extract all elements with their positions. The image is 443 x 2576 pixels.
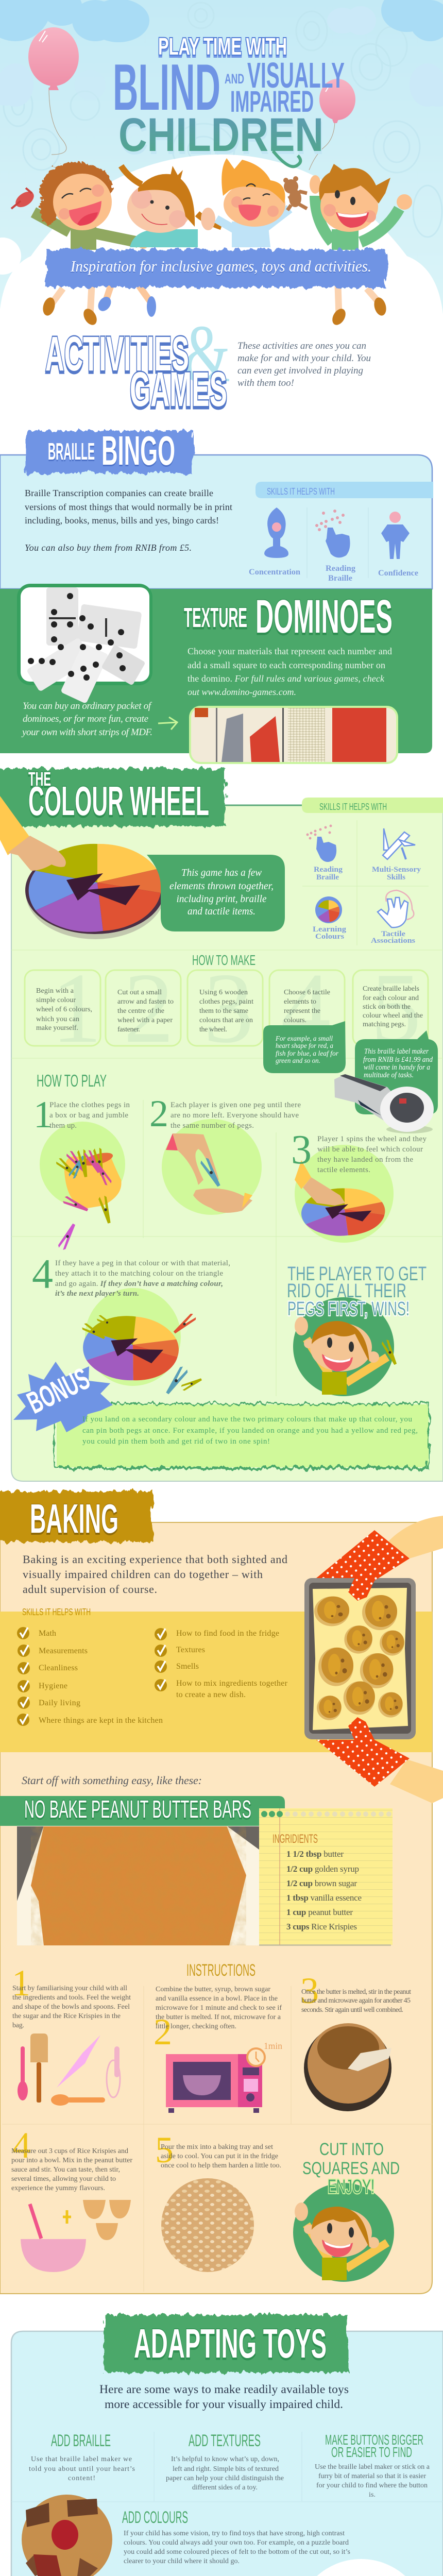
icon: reading braille bbox=[306, 824, 336, 862]
colour wheel banner: COLOUR WHEEL bbox=[28, 778, 209, 824]
skill checks right: Smells bbox=[176, 1662, 199, 1671]
adapting toys banner bbox=[104, 2315, 349, 2372]
step cards: Choose 6 tactile bbox=[284, 989, 330, 996]
callout: tactile example: fish for blue, a leaf for bbox=[276, 1050, 339, 1058]
panel: adapting toys bbox=[11, 2315, 443, 2576]
winner heading bbox=[287, 1263, 427, 1320]
dominoes italic note bbox=[21, 701, 152, 738]
hero header background bbox=[0, 0, 443, 345]
bonus text bbox=[82, 1415, 418, 1446]
texture dominoes heading: TEXTURE bbox=[184, 602, 247, 633]
children legs and shoes bbox=[41, 286, 388, 327]
skills bar bbox=[302, 798, 443, 813]
instruction step 5 text: aside to cool. You can put it in the fridge bbox=[161, 2153, 278, 2160]
recipe title banner bbox=[0, 1796, 285, 1826]
child with teddy bear bbox=[216, 158, 307, 247]
skill labels: Braille bbox=[328, 574, 352, 583]
instruction step 1 text: Start by familiarising your child with all bbox=[12, 1985, 127, 1992]
step 3 text: they have landed on from the bbox=[317, 1156, 413, 1164]
panel: braille bingo bbox=[0, 428, 433, 589]
skill labels: Learning bbox=[313, 925, 347, 934]
step cards: them to the same bbox=[199, 1007, 248, 1015]
activities intro text: can even get involved in playing bbox=[237, 365, 363, 376]
how to play heading: HOW TO PLAY bbox=[37, 1071, 107, 1090]
callout: tactile example: green and so on. bbox=[276, 1057, 320, 1065]
instruction step 2 text bbox=[156, 1986, 282, 2030]
microwave illustration bbox=[166, 2041, 282, 2113]
child waving bbox=[310, 164, 412, 250]
instruction step 3 text: Once the butter is melted, stir in the peanut bbox=[301, 1988, 411, 1996]
braille label maker image bbox=[334, 1074, 434, 1133]
callout: game description: and tactile items. bbox=[188, 906, 255, 917]
children illustration bbox=[11, 158, 412, 250]
step 2 text: Each player is given one peg until there bbox=[171, 1101, 301, 1109]
wooden shape puzzle photo bbox=[22, 2495, 112, 2576]
tip: add braille bbox=[29, 2431, 135, 2482]
step 1 text: a box or bag and jumble bbox=[49, 1111, 128, 1120]
instruction step 5 text bbox=[161, 2143, 281, 2170]
dominoes italic note: dominoes, or for more fun, create bbox=[23, 714, 148, 724]
how to make heading: HOW TO MAKE bbox=[192, 952, 255, 968]
tip: add colours: If your child has some vision, try to find toys that have strong, high contrast bbox=[124, 2530, 345, 2537]
cut into squares heading: SQUARES AND bbox=[302, 2159, 400, 2178]
skills band bbox=[0, 1607, 432, 1752]
step 2 illustration bbox=[162, 1119, 262, 1215]
notepad ingredients: 1/2 cup brown sugar bbox=[286, 1878, 357, 1888]
arrow bbox=[158, 717, 177, 730]
braille bingo banner bbox=[26, 428, 193, 473]
step 1 text bbox=[33, 1094, 130, 1136]
step cards: stick on both the bbox=[363, 1003, 411, 1011]
krispie mixture photo bbox=[161, 2178, 254, 2272]
microwave illustration: 1min bbox=[264, 2041, 282, 2051]
tip: add colours bbox=[122, 2508, 350, 2565]
skill labels: Skills bbox=[387, 873, 405, 882]
tip: make buttons bigger: Use the braille label maker or stick on a bbox=[315, 2463, 430, 2471]
large step numbers bbox=[12, 1962, 319, 2171]
step cards: 5 bbox=[371, 953, 421, 1064]
tip: add textures: It’s helpful to know what’s up, down, bbox=[171, 2455, 279, 2463]
icon: confidence bbox=[381, 512, 410, 559]
tip: add textures bbox=[166, 2431, 284, 2492]
panel: baking bbox=[0, 1492, 443, 2294]
step cards: Cut out a small bbox=[117, 989, 162, 996]
step 2 text: the same number of pegs. bbox=[171, 1122, 254, 1130]
step cards: Create braille labels bbox=[363, 985, 419, 993]
step 1 text: them up. bbox=[49, 1122, 77, 1130]
skill labels: Reading bbox=[326, 564, 355, 573]
dominoes text bbox=[188, 646, 392, 697]
right pink balloon bbox=[309, 79, 355, 170]
tip: add textures: ADD TEXTURES bbox=[189, 2431, 261, 2450]
braille bingo text: including, books, menus, bills and yes, bingo cards! bbox=[25, 515, 219, 526]
step 4 text: If they have a peg in that colour or with that material, bbox=[55, 1259, 230, 1267]
title: VISUALLY bbox=[247, 55, 345, 95]
skill labels: Associations bbox=[371, 937, 415, 945]
step 3 illustration bbox=[295, 1145, 394, 1243]
title: BLIND bbox=[113, 50, 220, 124]
bonus text: If you land on a secondary colour and have the two primary colours that make up that colour, you bbox=[82, 1415, 412, 1423]
bonus text: can pin both pegs at once. For example, if you landed on orange and you had a yellow and red peg, bbox=[82, 1427, 418, 1435]
braille bingo banner: BINGO bbox=[101, 428, 175, 473]
instruction step 1 text: and shape of the bowls and spoons. Feel bbox=[12, 2003, 130, 2011]
title: CHILDREN bbox=[118, 109, 323, 161]
notepad ingredients: 3 cups Rice Krispies bbox=[286, 1922, 357, 1931]
tagline banner bbox=[46, 249, 387, 287]
bonus box bbox=[54, 1404, 429, 1468]
skill checks left: Daily living bbox=[39, 1699, 80, 1707]
recipe title banner: NO BAKE PEANUT BUTTER BARS bbox=[24, 1796, 251, 1823]
skill checks right: Textures bbox=[176, 1646, 205, 1654]
activities intro text: These activities are ones you can bbox=[237, 341, 366, 351]
clouds bbox=[0, 0, 443, 107]
callout: braille label maker: multitude of tasks. bbox=[364, 1071, 414, 1079]
skill checks left: Hygiene bbox=[39, 1682, 67, 1690]
skill checks left: Cleanliness bbox=[39, 1664, 78, 1672]
title: IMPAIRED bbox=[230, 85, 314, 118]
skill labels: Multi-Sensory bbox=[372, 866, 421, 874]
spinner wheel bbox=[25, 844, 165, 939]
step cards: colours that are on bbox=[199, 1016, 253, 1024]
step 3 text bbox=[291, 1127, 427, 1174]
step 4 text: and go again. If they don’t have a matching colour, bbox=[55, 1280, 223, 1288]
instruction step 5 text: once cool to help them harden a little too. bbox=[161, 2162, 281, 2170]
baking banner: BAKING bbox=[30, 1496, 118, 1541]
large step numbers: 3 bbox=[300, 1970, 319, 2011]
large step numbers: 1 bbox=[12, 1962, 30, 2004]
domino photo bbox=[17, 584, 152, 704]
instruction step 3 text: butter and microwave again for another 45 bbox=[301, 1997, 411, 2005]
baking intro text: adult supervision of course. bbox=[23, 1583, 157, 1596]
step cards: colours. bbox=[284, 1016, 306, 1024]
tip: add colours: clearer to your child where it should go. bbox=[124, 2557, 240, 2565]
step 4 text: 4 bbox=[32, 1250, 53, 1297]
bonus starburst: BONUS bbox=[22, 1361, 95, 1420]
braille bingo text: You can also buy them from RNIB from £5. bbox=[25, 543, 192, 553]
step cards: wheel of 6 colours, bbox=[36, 1006, 92, 1013]
icon: reading braille hand bbox=[315, 510, 350, 557]
step cards: the centre of the bbox=[117, 1007, 164, 1015]
cut into squares heading bbox=[302, 2140, 400, 2178]
icon: learning colours bbox=[315, 896, 342, 923]
instruction step 2 text: microwave for 1 minute and check to see if bbox=[156, 2004, 282, 2012]
skill labels: Confidence bbox=[378, 569, 418, 578]
skill labels: Braille bbox=[316, 873, 339, 882]
step cards: 3 bbox=[203, 953, 253, 1064]
step cards: elements to bbox=[284, 998, 316, 1006]
callout: braille label maker: from RNIB is £41.99 and bbox=[363, 1056, 433, 1064]
large step numbers: 4 bbox=[12, 2125, 31, 2166]
instruction step 2 text: Combine the butter, syrup, brown sugar bbox=[156, 1986, 270, 1993]
step cards: clothes pegs, paint bbox=[199, 998, 253, 1006]
step cards: Begin with a bbox=[36, 987, 74, 995]
skills band: SKILLS IT HELPS WITH bbox=[22, 1607, 91, 1617]
instruction step 4 text bbox=[11, 2147, 132, 2192]
large step numbers: 5 bbox=[155, 2129, 174, 2171]
instruction step 4 text: sauce and stir. You can taste, then stir, bbox=[11, 2166, 120, 2174]
braille bingo text: Braille Transcription companies can create braille bbox=[25, 488, 213, 498]
doctor set image bbox=[296, 2559, 427, 2576]
tip: make buttons bigger: is. bbox=[369, 2491, 376, 2499]
callout: game description: elements thrown together, bbox=[169, 880, 274, 892]
baking intro text bbox=[23, 1553, 287, 1596]
step cards: which you can bbox=[36, 1015, 79, 1023]
boy celebrating bbox=[293, 2183, 394, 2282]
title: PLAY TIME WITH bbox=[158, 33, 287, 60]
activities and games heading: & bbox=[183, 308, 230, 399]
braille bingo banner: BRAILLE bbox=[48, 438, 95, 465]
tip: add braille: Use that braille label maker we bbox=[31, 2455, 132, 2463]
melted butter bowl photo bbox=[304, 2023, 391, 2111]
activities and games heading: ACTIVITIES bbox=[45, 327, 189, 381]
activities intro text: make for and with your child. You bbox=[237, 353, 371, 364]
braille bingo text bbox=[25, 488, 232, 553]
step cards: arrow and fasten to bbox=[117, 998, 174, 1006]
step cards: Using 6 wooden bbox=[199, 989, 248, 996]
hand on wheel bbox=[0, 796, 66, 871]
step 3 text: 3 bbox=[291, 1127, 312, 1173]
notepad ingredients: 1 tbsp vanilla essence bbox=[286, 1893, 362, 1903]
skill checks left: Math bbox=[39, 1629, 56, 1638]
callout: tactile example: heart shape for red, a bbox=[276, 1042, 333, 1050]
skill checks right: to create a new dish. bbox=[176, 1690, 246, 1699]
callout: game description bbox=[147, 855, 285, 931]
dominoes italic note: You can buy an ordinary packet of bbox=[23, 701, 152, 711]
arms holding tray bbox=[384, 1516, 443, 1803]
instruction step 4 text: several times, allowing your child to bbox=[11, 2175, 116, 2183]
adapting intro text: more accessible for your visually impaired child. bbox=[105, 2398, 343, 2411]
tip: add textures: paper can help your child distinguish the bbox=[166, 2475, 284, 2482]
dominoes text: Choose your materials that represent each number and bbox=[188, 646, 392, 656]
tip: add colours: colours. You could always add your own too. For example, on a puzzle board bbox=[124, 2539, 349, 2547]
skill checks right: How to mix ingredients together bbox=[176, 1679, 288, 1688]
tip: add textures: left and right. Simple bits of textured bbox=[173, 2465, 279, 2473]
instruction step 3 text: seconds. Stir again until well combined. bbox=[301, 2006, 403, 2014]
activities intro text bbox=[237, 341, 371, 388]
skill labels bbox=[313, 866, 421, 945]
dominoes text: the domino. For full rules and various games, check bbox=[188, 673, 385, 684]
skill checks right bbox=[155, 1628, 288, 1699]
step cards: 4 bbox=[281, 953, 331, 1064]
instruction step 1 text: the sugar and the Rice Krispies in the bbox=[12, 2012, 121, 2020]
instruction step 4 text: experience the yummy flavours. bbox=[11, 2184, 105, 2192]
title bbox=[113, 33, 345, 166]
step cards: represent the bbox=[284, 1007, 320, 1015]
baking tools illustration bbox=[18, 2033, 120, 2106]
tip: make buttons bigger: furry bit of material so that it is easier bbox=[318, 2472, 426, 2480]
tagline banner: Inspiration for inclusive games, toys and activities. bbox=[70, 257, 371, 275]
activities and games heading bbox=[45, 308, 230, 417]
child with helicopter bbox=[11, 160, 149, 250]
step 1 text: 1 bbox=[33, 1094, 53, 1136]
boy winner illustration bbox=[293, 1297, 399, 1396]
large step numbers: 2 bbox=[154, 2011, 172, 2053]
step cards: matching pegs. bbox=[363, 1021, 406, 1028]
step 3 text: will be able to feel which colour bbox=[317, 1145, 423, 1154]
step 2 text: are no more left. Everyone should have bbox=[171, 1111, 299, 1120]
step cards: colour wheel and the bbox=[363, 1012, 423, 1020]
left pink balloon bbox=[28, 27, 79, 155]
step cards: simple colour bbox=[36, 996, 76, 1004]
tip: add colours: you could add some coloured pieces of felt to the bottom of the cut out, so it’s bbox=[124, 2548, 350, 2556]
step 1 illustration bbox=[40, 1122, 125, 1251]
dominoes text: add a small square to each corresponding number on bbox=[188, 660, 385, 670]
step cards: 1 bbox=[52, 953, 102, 1064]
mixing illustration bbox=[21, 2200, 131, 2272]
bonus text: you could pin them both and get rid of two in one spin! bbox=[82, 1437, 270, 1446]
icon: multi-sensory tool bbox=[383, 828, 415, 859]
title: AND bbox=[225, 71, 244, 87]
skill checks left: Where things are kept in the kitchen bbox=[39, 1716, 163, 1725]
notepad ingredients: 1 cup peanut butter bbox=[286, 1907, 353, 1917]
notepad ingredients: INGRIDIENTS bbox=[272, 1832, 318, 1846]
colour wheel banner bbox=[0, 769, 226, 826]
step cards bbox=[25, 953, 428, 1064]
instruction step 3 text bbox=[301, 1988, 411, 2014]
cut into squares heading: CUT INTO bbox=[319, 2140, 384, 2159]
skill checks left bbox=[17, 1627, 163, 1726]
step cards: 2 bbox=[124, 953, 174, 1064]
tip: add colours: ADD COLOURS bbox=[122, 2508, 188, 2527]
braille bingo text: versions of most things that would normally be in print bbox=[25, 502, 232, 512]
start off text: Start off with something easy, like these: bbox=[22, 1774, 202, 1787]
step cards: make yourself. bbox=[36, 1024, 78, 1032]
callout: game description: This game has a few bbox=[181, 867, 262, 878]
notepad ingredients: 1/2 cup golden syrup bbox=[286, 1864, 359, 1874]
step cards: wheel with a paper bbox=[117, 1016, 173, 1024]
instruction step 4 text: pour into a bowl. Mix in the peanut butter bbox=[11, 2157, 132, 2164]
tip: add braille: ADD BRAILLE bbox=[51, 2431, 111, 2450]
skill checks left: Measurements bbox=[39, 1647, 88, 1655]
skills bar bbox=[255, 482, 433, 498]
baking intro text: Baking is an exciting experience that both sighted and bbox=[23, 1553, 287, 1566]
callout: braille label maker: will come in handy for a bbox=[364, 1063, 430, 1072]
skill labels: Colours bbox=[315, 933, 344, 941]
adapting intro text: Here are some ways to make readily available toys bbox=[99, 2383, 349, 2396]
instruction step 2 text: the butter is melted. If not, microwave for a bbox=[156, 2013, 281, 2021]
skill checks right: How to find food in the fridge bbox=[176, 1629, 279, 1638]
icon: concentration bbox=[264, 507, 288, 558]
texture dominoes heading bbox=[184, 590, 393, 643]
instructions heading: INSTRUCTIONS bbox=[186, 1961, 255, 1979]
dominoes italic note: your own with short strips of MDF. bbox=[21, 727, 152, 738]
instruction step 1 text bbox=[12, 1985, 131, 2029]
notepad ingredients bbox=[259, 1808, 393, 1946]
instruction step 1 text: bag. bbox=[12, 2022, 24, 2029]
step 2 text: 2 bbox=[149, 1093, 168, 1135]
tip: make buttons bigger bbox=[315, 2432, 430, 2499]
skills bar: SKILLS IT HELPS WITH bbox=[267, 486, 335, 497]
step 1 text: Place the clothes pegs in bbox=[49, 1101, 130, 1109]
instruction step 5 text: Pour the mix into a baking tray and set bbox=[161, 2143, 273, 2151]
step cards: fastener. bbox=[117, 1026, 140, 1033]
skill labels: Reading bbox=[314, 866, 343, 874]
step cards: the wheel. bbox=[199, 1026, 227, 1033]
textured domino photo bbox=[189, 706, 398, 764]
step 4 text bbox=[32, 1250, 230, 1298]
tip: add braille: told you about until your heart’s bbox=[29, 2465, 135, 2473]
callout: braille label maker bbox=[355, 1030, 438, 1114]
step 3 text: tactile elements. bbox=[317, 1166, 370, 1174]
instruction step 1 text: the ingredients and tools. Feel the weight bbox=[12, 1994, 131, 2002]
step 2 text bbox=[149, 1093, 301, 1135]
step 4 text: they attach it to the matching colour on the triangle bbox=[55, 1269, 223, 1278]
oven mitts bbox=[316, 1530, 410, 1787]
baking tray with cookies bbox=[304, 1578, 416, 1739]
baking banner bbox=[0, 1492, 152, 1542]
adapting intro text bbox=[99, 2383, 349, 2411]
notepad ingredients: 1 1/2 tbsp butter bbox=[286, 1849, 344, 1859]
skill labels bbox=[249, 564, 418, 583]
callout: braille label maker: This braille label maker bbox=[364, 1047, 429, 1056]
icon: tactile hand bbox=[378, 890, 414, 927]
bonus starburst bbox=[13, 1361, 113, 1432]
skill labels: Concentration bbox=[249, 568, 300, 577]
child with braids bbox=[121, 166, 222, 247]
tip: add braille: content! bbox=[68, 2475, 95, 2482]
step 3 text: Player 1 spins the wheel and they bbox=[317, 1135, 427, 1143]
tip: make buttons bigger: for your child to find where the button bbox=[316, 2482, 428, 2489]
tip: add textures: different sides of a toy. bbox=[192, 2484, 258, 2492]
enjoy heading: ENJOY! bbox=[328, 2176, 374, 2198]
callout: tactile example bbox=[263, 1021, 346, 1073]
peanut butter bars photo bbox=[17, 1826, 259, 1945]
instruction step 2 text: little longer, checking often. bbox=[156, 2023, 236, 2030]
step 4 text: it’s the next player’s turn. bbox=[55, 1290, 139, 1298]
panel: colour wheel bbox=[0, 769, 443, 1481]
step 4 illustration bbox=[80, 1288, 203, 1396]
skill labels: Tactile bbox=[381, 930, 405, 938]
instruction step 4 text: Measure out 3 cups of Rice Krispies and bbox=[11, 2147, 128, 2155]
baking intro text: visually impaired children can do together – with bbox=[23, 1568, 263, 1581]
panel: texture dominoes bbox=[0, 584, 432, 764]
activities intro text: with them too! bbox=[237, 378, 294, 388]
callout: tactile example: For example, a small bbox=[275, 1035, 333, 1043]
instruction step 2 text: and vanilla essence in a bowl. Place in the bbox=[156, 1995, 278, 2003]
skills bar: SKILLS IT HELPS WITH bbox=[319, 802, 387, 812]
dominoes text: out www.domino-games.com. bbox=[188, 687, 296, 697]
callout: game description: including print, braille bbox=[176, 893, 267, 905]
step cards: for each colour and bbox=[363, 994, 419, 1002]
activities and games heading: GAMES bbox=[130, 362, 227, 417]
colour wheel banner: THE bbox=[28, 769, 51, 790]
